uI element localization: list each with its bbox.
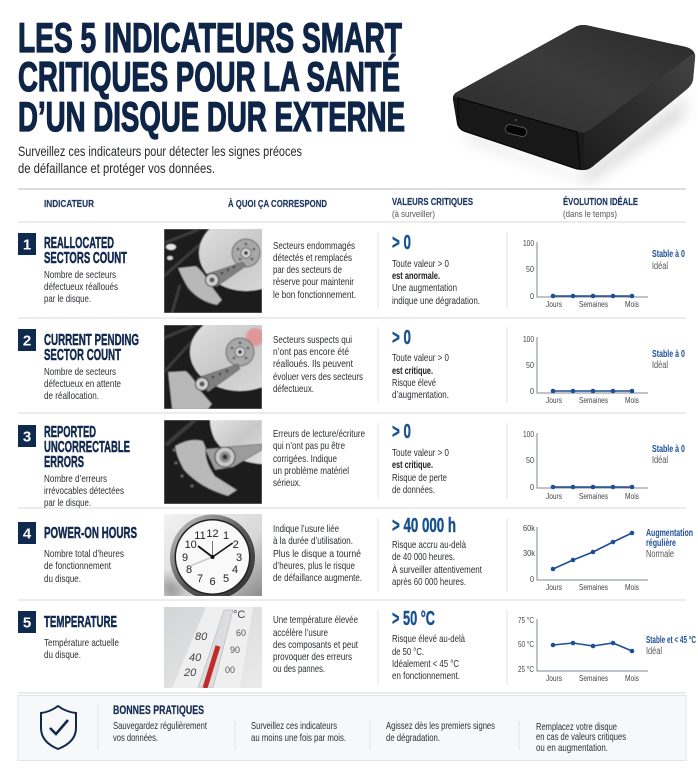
critical value 2 (392, 327, 449, 401)
indicator name and description 1: par le disque. (44, 293, 91, 305)
critical value 4: > 40 000 h (392, 515, 456, 537)
chart legend 4 (646, 528, 693, 560)
line chart 2: 0 (530, 386, 534, 396)
indicator name and description 2 (44, 332, 139, 402)
image: thermometer: 20 (183, 667, 197, 679)
image: thermometer: 40 (189, 652, 202, 664)
tip 1: vos données. (113, 732, 158, 744)
critical value 4: Risque accru au-delà (392, 539, 466, 551)
critical value 5: de 50 °C. (392, 646, 424, 658)
indicator name and description 4: du disque. (44, 573, 81, 585)
critical value 3: de données. (392, 484, 435, 496)
description 5: Une température élevée (273, 614, 358, 626)
image: thermometer: 00 (225, 665, 235, 675)
line chart 3: 100 (523, 429, 534, 439)
critical value 3: Toute valeur > 0 (392, 447, 449, 459)
description 3: sérieux. (273, 477, 301, 489)
image: thermometer: °C (233, 609, 245, 621)
description 2: évoluer vers des secteurs (273, 371, 363, 383)
critical value 5: > 50 °C (392, 608, 435, 630)
description 2: défectueux. (273, 383, 314, 395)
tip 3: Agissez dès les premiers signes (386, 720, 495, 732)
indicator name and description 5: du disque. (44, 649, 81, 661)
image: wall clock: 9 (182, 552, 188, 564)
image: actuator arm close-up (164, 420, 262, 504)
description 5: provoquer des erreurs (273, 651, 352, 663)
description 2: n’ont pas encore été (273, 346, 349, 358)
critical value 5: Idéalement < 45 °C (392, 658, 459, 670)
chart legend 1: Stable à 0 (652, 249, 685, 260)
line chart 5: 50 °C (518, 639, 534, 649)
image: wall clock: 8 (186, 564, 192, 576)
tip 3 (386, 720, 495, 744)
description 5: ou des pannes. (273, 663, 325, 675)
title: CRITIQUES POUR LA SANTÉ (18, 53, 400, 100)
indicator name and description 3: Nombre d’erreurs (44, 473, 107, 485)
column headers: ÉVOLUTION IDÉALE (563, 195, 638, 208)
line chart 2: Jours (546, 395, 562, 405)
critical value 3: > 0 (392, 421, 411, 443)
indicator name and description 2: SECTOR COUNT (44, 347, 121, 364)
line chart 1: 0 (530, 291, 534, 301)
line chart 1: 50 (526, 264, 534, 274)
line chart 1: Semaines (579, 299, 608, 309)
critical value 4: de 40 000 heures. (392, 551, 455, 563)
column headers: À QUOI ÇA CORRESPOND (228, 197, 327, 210)
chart legend 5: Idéal (646, 646, 662, 657)
description 3: qui n’ont pas pu être (273, 440, 345, 452)
critical value 2: Risque élevé (392, 377, 436, 389)
description 4 (273, 523, 362, 584)
number badge 4 (18, 522, 36, 544)
column headers: (dans le temps) (563, 209, 617, 220)
chart legend 1: Idéal (652, 261, 668, 272)
line chart 3: Semaines (579, 491, 608, 501)
number badge 2 (18, 329, 36, 351)
chart legend 2 (652, 349, 685, 371)
indicator name and description 4: Nombre total d’heures (44, 548, 124, 560)
line chart 3 (523, 429, 648, 501)
tip 2: Surveillez ces indicateurs (251, 720, 337, 732)
critical value 1: Une augmentation (392, 282, 457, 294)
chart legend 2: Stable à 0 (652, 349, 685, 360)
indicator name and description 1: REALLOCATED (44, 235, 114, 252)
tip 4 (536, 721, 626, 754)
line chart 2: Semaines (579, 395, 608, 405)
indicator name and description 1 (44, 235, 127, 305)
title: LES 5 INDICATEURS SMART (18, 14, 402, 61)
column headers: VALEURS CRITIQUES (392, 196, 473, 208)
line chart 1: Jours (546, 299, 562, 309)
line chart 5: Mois (625, 673, 639, 683)
subtitle (18, 144, 302, 176)
indicator name and description 4 (44, 525, 137, 585)
indicator name and description 4: POWER-ON HOURS (44, 525, 137, 542)
chart legend 3: Idéal (652, 455, 668, 466)
description 1: détectés et remplacés (273, 252, 352, 264)
tip 4: Remplacez votre disque (536, 721, 617, 733)
description 1: le bon fonctionnement. (273, 289, 356, 301)
image: thermometer: 80 (195, 631, 208, 643)
line chart 5: 25 °C (518, 664, 534, 674)
indicator name and description 1: défectueux réalloués (44, 281, 118, 293)
image: wall clock: 4 (232, 564, 238, 576)
indicator name and description 2: défectueux en attente (44, 378, 121, 390)
critical value 3 (392, 421, 449, 496)
indicator name and description 3: REPORTED (44, 424, 96, 441)
line chart 4: 30k (523, 548, 536, 558)
tip 1 (113, 720, 207, 744)
line chart 2: 100 (523, 334, 534, 344)
critical value 5 (392, 608, 465, 682)
critical value 1: Toute valeur > 0 (392, 258, 449, 270)
image: wall clock: 7 (197, 573, 203, 585)
tip 4: en cas de valeurs critiques (536, 731, 626, 743)
image: wall clock: 10 (185, 539, 197, 551)
description 3: Erreurs de lecture/écriture (273, 428, 365, 440)
description 1: réserve pour maintenir (273, 276, 354, 288)
indicator name and description 2: Nombre de secteurs (44, 366, 116, 378)
critical value 3: est critique. (392, 459, 433, 471)
image: wall clock: 11 (194, 530, 206, 542)
line chart 3: Mois (625, 491, 639, 501)
number badge 5: 5 (23, 614, 31, 632)
line chart 3: 50 (526, 455, 534, 465)
panel: row 2 current pending sector count (18, 325, 685, 409)
critical value 1: est anormale. (392, 270, 440, 282)
image: thermometer: 60 (236, 628, 246, 638)
critical value 2: > 0 (392, 327, 411, 349)
description 2: réalloués. Ils peuvent (273, 358, 353, 370)
chart legend 2: Idéal (652, 360, 668, 371)
critical value 3: Risque de perte (392, 472, 447, 484)
line chart 2: 50 (526, 360, 534, 370)
image: hard disk with red damaged sectors (164, 325, 262, 409)
line chart 5 (518, 615, 648, 683)
description 3: corrigées. Indique (273, 453, 337, 465)
panel: row 5 temperature (18, 607, 696, 688)
description 3: un problème matériel (273, 465, 349, 477)
indicator name and description 5: TEMPERATURE (44, 614, 117, 631)
indicator name and description 3: UNCORRECTABLE (44, 439, 130, 456)
indicator name and description 5: Température actuelle (44, 637, 119, 649)
image: wall clock: 3 (236, 552, 242, 564)
description 5: des composants et peut (273, 639, 358, 651)
tip 2 (251, 720, 346, 744)
indicator name and description 5 (44, 614, 119, 661)
chart legend 3: Stable à 0 (652, 444, 685, 455)
panel: bonnes pratiques (18, 696, 686, 760)
critical value 2: est critique. (392, 365, 433, 377)
number badge 1 (18, 233, 36, 255)
image: wall clock: 12 (206, 528, 219, 540)
critical value 1: indique une dégradation. (392, 295, 480, 307)
line chart 4: Semaines (579, 582, 608, 592)
tip 2: au moins une fois par mois. (251, 732, 346, 744)
line chart 5: Jours (546, 673, 562, 683)
chart legend 3 (652, 444, 685, 466)
number badge 3 (18, 425, 36, 447)
column headers: (à surveiller) (392, 209, 435, 220)
chart legend 1 (652, 249, 685, 272)
divider rule (18, 188, 686, 190)
line chart 3: 0 (530, 482, 534, 492)
number badge 4: 4 (23, 526, 32, 542)
description 5 (273, 614, 358, 675)
image: wall clock: 6 (209, 576, 216, 588)
description 4: d’heures, plus le risque (273, 560, 355, 572)
critical value 5: en fonctionnement. (392, 670, 460, 682)
line chart 2: Mois (625, 395, 639, 405)
chart legend 5 (646, 635, 696, 657)
image: wall clock: 2 (233, 539, 239, 551)
critical value 4 (392, 515, 482, 588)
subtitle: Surveillez ces indicateurs pour détecter les signes préoces (18, 144, 302, 159)
description 4: à la durée d’utilisation. (273, 535, 353, 547)
image: external hard drive (453, 25, 695, 182)
indicator name and description 3: par le disque. (44, 497, 91, 509)
image: wall clock: 5 (223, 573, 229, 585)
description 5: accélère l’usure (273, 627, 328, 639)
indicator name and description 4: de fonctionnement (44, 560, 111, 572)
tip 1: Sauvegardez régulièrement (113, 720, 207, 732)
critical value 2: Toute valeur > 0 (392, 352, 449, 364)
line chart 5: 75 °C (518, 615, 534, 625)
description 4: Indique l’usure liée (273, 523, 339, 535)
indicator name and description 3: ERRORS (44, 454, 84, 471)
description 1: Secteurs endommagés (273, 240, 355, 252)
number badge 1: 1 (23, 236, 31, 254)
title (18, 14, 405, 140)
image: thermometer: 90 (230, 645, 240, 655)
line chart 4: Mois (625, 582, 639, 592)
line chart 3: Jours (546, 491, 562, 501)
number badge 3: 3 (23, 428, 31, 446)
line chart 4: 0 (530, 574, 534, 584)
panel: row 4 power-on hours (18, 514, 693, 600)
line chart 1: 100 (523, 238, 534, 248)
line chart 4: 60k (523, 523, 536, 533)
description 1 (273, 240, 356, 301)
critical value 4: après 60 000 heures. (392, 576, 466, 588)
image: thermometer (164, 607, 262, 688)
description 2 (273, 334, 363, 395)
panel: row 3 reported uncorrectable errors (18, 420, 685, 509)
line chart 5: Semaines (579, 673, 608, 683)
description 3 (273, 428, 365, 489)
description 4: Plus le disque a tourné (273, 548, 361, 560)
column headers (44, 195, 638, 220)
critical value 1 (392, 232, 480, 307)
description 4: de défaillance augmente. (273, 572, 362, 584)
indicator name and description 3 (44, 424, 130, 509)
description 2: Secteurs suspects qui (273, 334, 352, 346)
number badge 5 (18, 611, 36, 633)
subtitle: de défaillance et protéger vos données. (18, 161, 215, 176)
title: D’UN DISQUE DUR EXTERNE (18, 93, 405, 140)
indicator name and description 2: CURRENT PENDING (44, 332, 139, 349)
critical value 4: À surveiller attentivement (392, 563, 482, 576)
chart legend 4: régulière (646, 538, 676, 549)
heading: bonnes pratiques: BONNES PRATIQUES (113, 703, 204, 717)
line chart 4 (523, 523, 648, 592)
indicator name and description 1: SECTORS COUNT (44, 250, 127, 267)
indicator name and description 3: irrévocables détectées (44, 485, 124, 497)
line chart 2 (523, 334, 648, 405)
number badge 2: 2 (23, 332, 31, 350)
image: open hard disk platter (164, 229, 262, 313)
image: wall clock: 1 (223, 530, 229, 542)
line chart 1 (523, 238, 648, 309)
line chart 4: Jours (546, 582, 562, 592)
image: wall clock (164, 514, 262, 600)
critical value 1: > 0 (392, 232, 411, 254)
panel: row 1 reallocated sectors count (18, 229, 685, 313)
indicator name and description 1: Nombre de secteurs (44, 269, 116, 281)
icon: shield with check (41, 706, 76, 749)
critical value 2: d’augmentation. (392, 389, 449, 401)
description 1: par des secteurs de (273, 264, 342, 276)
chart legend 4: Normale (646, 549, 674, 560)
column headers: INDICATEUR (44, 198, 94, 210)
tip 3: de dégradation. (386, 732, 440, 744)
line chart 1: Mois (625, 299, 639, 309)
tip 4: ou en augmentation. (536, 742, 608, 754)
indicator name and description 2: de réallocation. (44, 390, 99, 402)
critical value 5: Risque élevé au-delà (392, 633, 465, 645)
